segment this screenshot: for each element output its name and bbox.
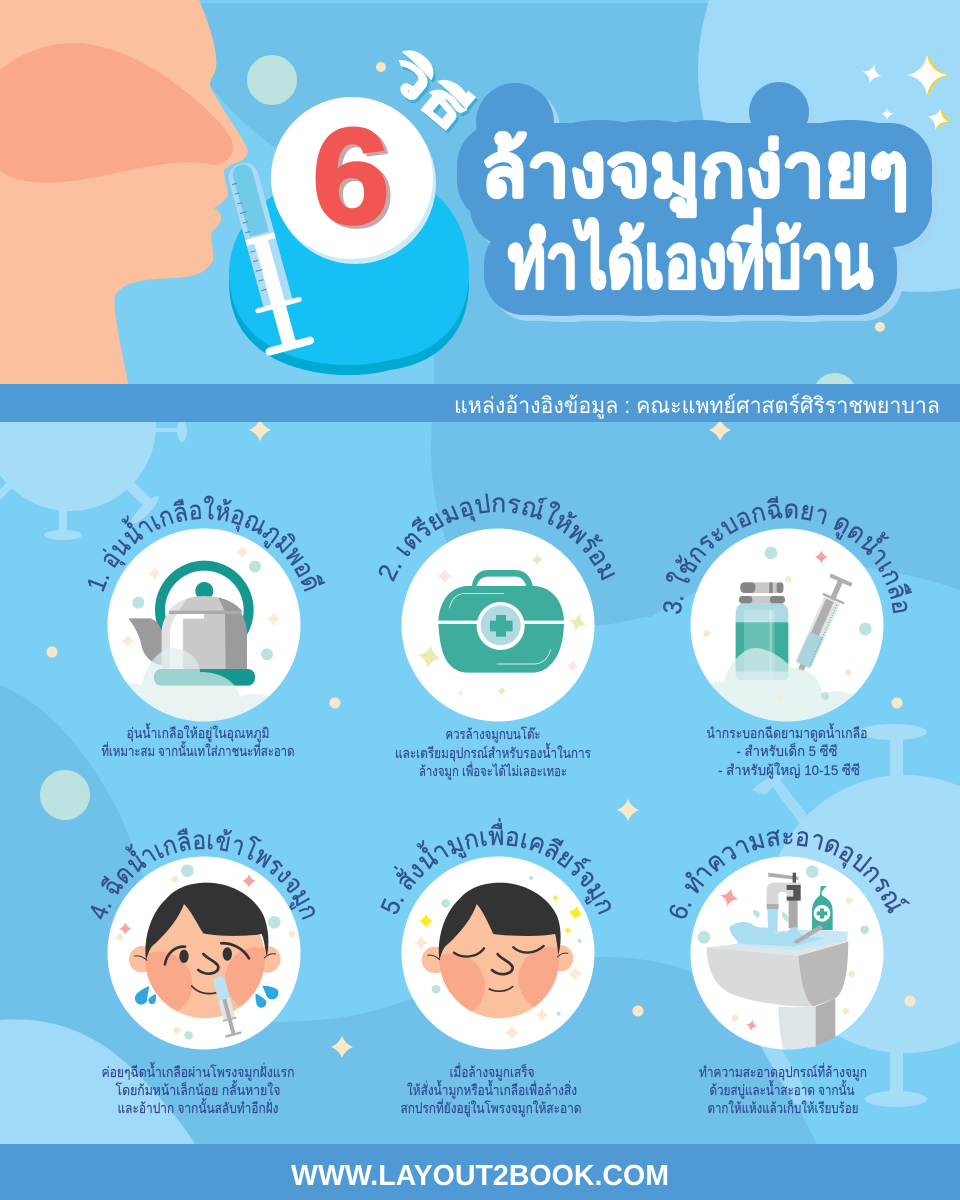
method label: วิธี (376, 42, 480, 142)
icon: relaxed face (414, 876, 584, 1040)
method label: วิธี (378, 45, 482, 145)
step 5 circle (402, 856, 594, 1050)
step 3 description: - สำหรับเด็ก 5 ซีซี (736, 742, 838, 759)
method label (376, 42, 482, 145)
icon: kettle (121, 546, 281, 686)
step 2 (378, 493, 616, 780)
step 3 dots over cloud (776, 692, 829, 700)
step 5 description: เมื่อล้างจมูกเสร็จ (450, 1063, 534, 1081)
step 3 circle (690, 528, 884, 722)
header (0, 0, 960, 417)
decorative dots and sparkles (46, 419, 916, 1058)
step 5 description (400, 1063, 582, 1117)
footer: WWW.LAYOUT2BOOK.COM (291, 1160, 669, 1192)
step 2 heading: 2. เตรียมอุปกรณ์ให้พร้อม (378, 493, 616, 582)
step 4 heading: 4. ฉีดน้ำเกลือเข้าโพรงจมูก (90, 828, 315, 920)
virus decoration: bottom right (752, 724, 960, 1107)
step 5 description: สกปรกที่ยังอยู่ในโพรงจมูกให้สะอาด (400, 1099, 582, 1117)
step 4 description: โดยก้มหน้าเล็กน้อย กลั้นหายใจ (116, 1080, 280, 1098)
cloud: step 1 (127, 648, 268, 722)
step 6 heading: 6. ทำความสะอาดอุปกรณ์ (670, 830, 910, 918)
step 3 description: นำกระบอกฉีดยามาดูดน้ำเกลือ (706, 723, 868, 742)
step 2 circle (402, 528, 594, 722)
step 6 description (699, 1063, 867, 1116)
step 3 heading: 3. ใช้กระบอกฉีดยา ดูดน้ำเกลือ (663, 496, 912, 614)
step 1 description (102, 723, 294, 759)
step 4 description: ค่อยๆฉีดน้ำเกลือผ่านโพรงจมูกฝั่งแรก (102, 1062, 294, 1081)
step 3 description: - สำหรับผู้ใหญ่ 10-15 ซีซี (718, 762, 860, 779)
source band (0, 384, 960, 422)
step 6 description: ตากให้แห้งแล้วเก็บให้เรียบร้อย (708, 1099, 858, 1116)
footer (0, 1144, 960, 1200)
step 5 heading: 5. สั่งน้ำมูกเพื่อเคลียร์จมูก (380, 818, 611, 914)
step 5 description: ให้สั่งน้ำมูกหรือน้ำเกลือเพื่อล้างสิ่ง (407, 1080, 577, 1099)
icon: saline bottle and syringe (703, 547, 872, 680)
step 6 description: ด้วยสบู่และน้ำสะอาด จากนั้น (710, 1080, 855, 1099)
step 2 description: และเตรียมอุปกรณ์สำหรับรองน้ำในการ (395, 743, 591, 762)
sparkles (860, 54, 954, 132)
head profile (0, 0, 248, 384)
step 4 description (102, 1062, 294, 1116)
step 1 circle (108, 528, 300, 722)
number circle: 6 (312, 100, 390, 252)
icon: wash basin (698, 865, 869, 1050)
step 3 (663, 496, 912, 779)
step 1 description: อุ่นน้ำเกลือให้อยู่ในอุณหภูมิ (126, 723, 270, 742)
title (457, 82, 938, 322)
step 6 description: ทำความสะอาดอุปกรณ์ที่ล้างจมูก (699, 1063, 867, 1081)
number circle (271, 97, 436, 264)
header background (0, 0, 960, 417)
number circle: 6 (316, 103, 394, 255)
step 2 description: ล้างจมูก เพื่อจะได้ไม่เลอะเทอะ (419, 762, 567, 780)
source band: แหล่งอ้างอิงข้อมูล : คณะแพทย์ศาสตร์ศิริราชพยาบาล (454, 393, 940, 419)
cloud: step 3 (710, 648, 854, 722)
step 4 (90, 828, 315, 1116)
step 1 description: ที่เหมาะสม จากนั้นเทใส่ภาชนะที่สะอาด (102, 741, 294, 759)
icon: face with syringe (116, 864, 295, 1040)
step 1 heading: 1. อุ่นน้ำเกลือให้อุณภูมิพอดี (88, 496, 326, 592)
step 6 circle (690, 856, 884, 1050)
step 1 (88, 496, 326, 759)
syringe (216, 157, 315, 357)
step 6 (670, 830, 910, 1116)
step 3 description (706, 723, 868, 779)
step 2 description (395, 726, 591, 780)
virus decoration: top left (0, 339, 187, 540)
step 5 (380, 818, 611, 1117)
title: ล้างจมูกง่ายๆ (481, 128, 909, 217)
blue blob (229, 170, 469, 375)
step 2 description: ควรล้างจมูกบนโต๊ะ (446, 726, 540, 743)
step 4 description: และอ้าปาก จากนั้นสลับทำอีกฝั่ง (118, 1098, 278, 1116)
icon: medical box (417, 554, 589, 696)
step 4 circle (108, 856, 300, 1050)
